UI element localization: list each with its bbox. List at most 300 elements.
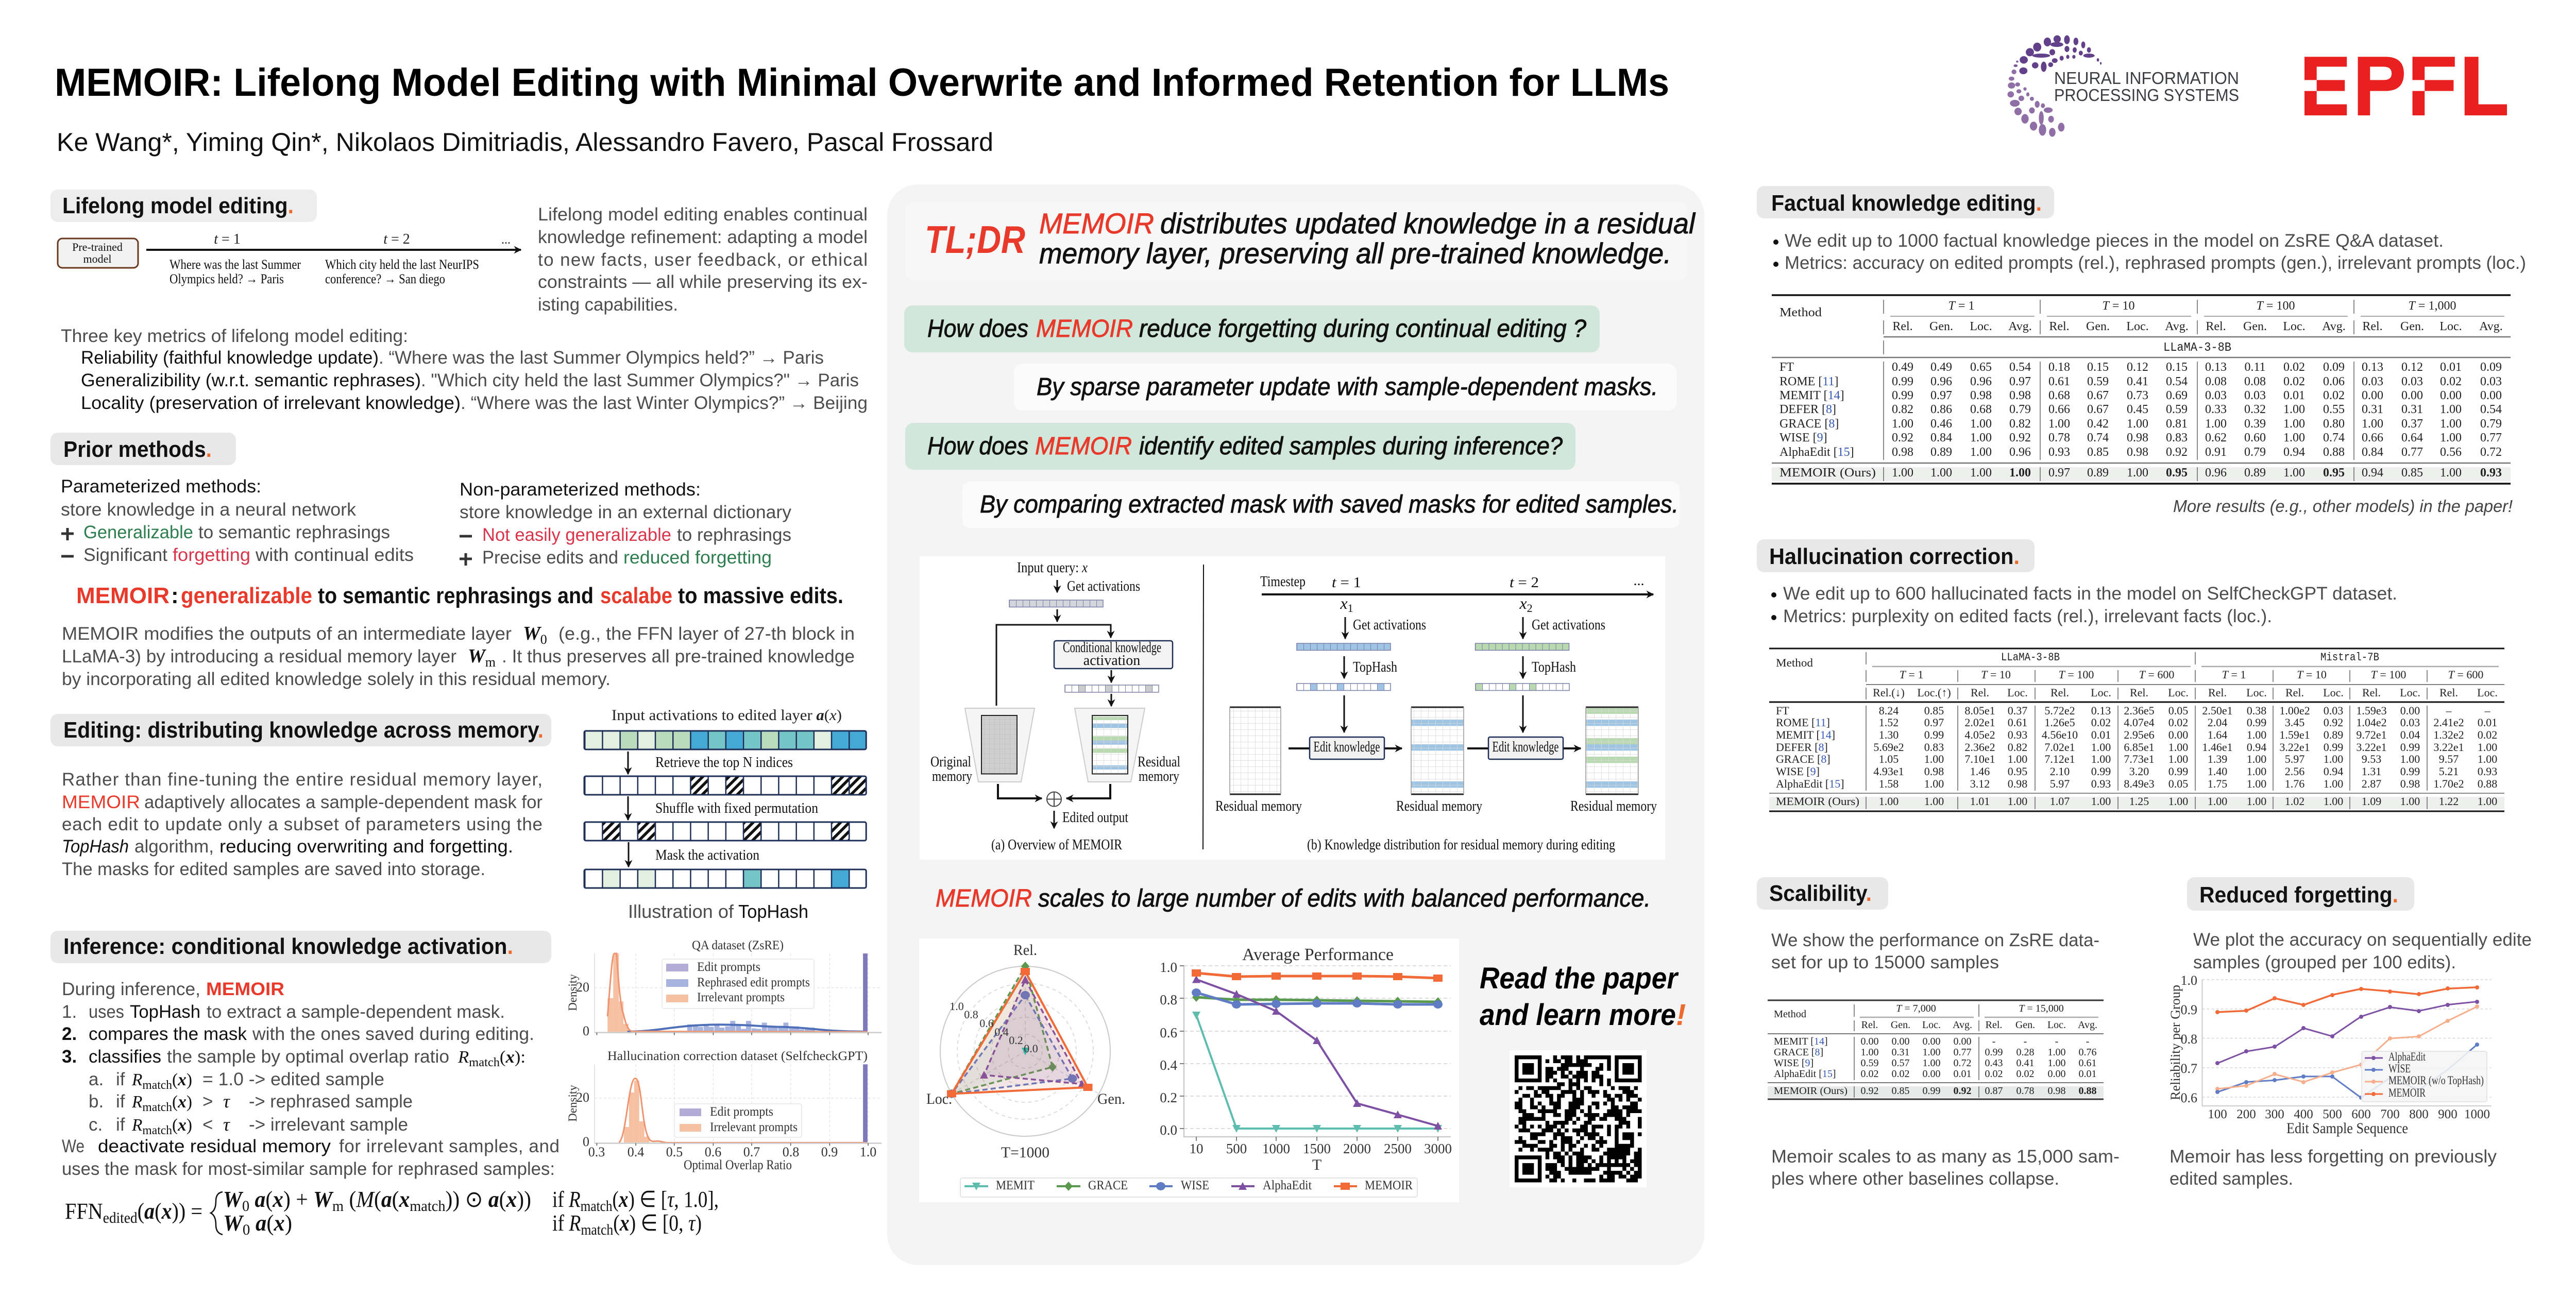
table: hallucination results: 2.36e2 <box>1964 741 1995 754</box>
table: scalability results: 1.00 <box>1923 1057 1940 1069</box>
axis labels: 0.8 <box>783 1145 799 1159</box>
table: hallucination results: 0.99 <box>2324 741 2343 754</box>
radar chart: 0.0 <box>1024 1042 1038 1055</box>
table: hallucination results: 0.82 <box>2008 741 2027 754</box>
table: factual results: 0.68 <box>1970 403 1992 416</box>
callout: TL;DR: distributes updated knowledge in a residual <box>1160 207 1696 240</box>
text: scalability intro <box>1771 930 2099 972</box>
text: non-parameterized methods: Non-parameterized methods: <box>460 480 701 500</box>
text: inference steps <box>62 979 560 1179</box>
table: hallucination results: 1.32e2 <box>2433 728 2464 741</box>
table: factual results: 0.08 <box>2244 375 2266 388</box>
table: factual results: 0.66 <box>2048 403 2070 416</box>
table: hallucination results: 3.22e1 <box>2356 741 2387 754</box>
logo text: NEURAL INFORMATION <box>2054 69 2239 88</box>
row: shuffled <box>584 822 866 841</box>
equation: ( <box>613 1210 620 1236</box>
table: hallucination results: 7.02e1 <box>2044 741 2075 754</box>
table: hallucination results: 7.73e1 <box>2124 753 2155 765</box>
table: hallucination results: 1.00 <box>2247 777 2266 790</box>
line chart: reliability per group <box>2168 973 2492 1137</box>
table: scalability results: MEMIT [14] <box>1774 1036 1828 1047</box>
table: factual results: 0.82 <box>2009 417 2031 431</box>
table: factual results: Gen. <box>2086 320 2110 333</box>
line chart: reliability per group: 400 <box>2294 1107 2313 1121</box>
radar chart <box>926 942 1125 1161</box>
axis labels: Density <box>566 1085 579 1122</box>
question 2 <box>905 423 1575 470</box>
equation: a(x) <box>256 1210 292 1236</box>
table: scalability results: 0.87 <box>1985 1085 2003 1097</box>
table: scalability results: - <box>2086 1036 2089 1047</box>
equation: match <box>581 1198 613 1215</box>
table: hallucination results: Loc. <box>2007 686 2028 699</box>
equation: a(x)) = <box>144 1199 206 1224</box>
text: MEMOIR description: W <box>468 645 485 667</box>
table: scalability results: T <box>1896 1003 1903 1014</box>
table: factual results: 0.09 <box>2323 361 2345 374</box>
text: inference steps: R <box>131 1092 143 1112</box>
text: inference steps: < <box>202 1115 213 1135</box>
table: hallucination results: 0.01 <box>2091 728 2111 741</box>
table: factual results: 0.59 <box>2166 403 2188 416</box>
table: hallucination results: 2.04 <box>2208 716 2227 729</box>
chart title: Hallucination correction dataset (SelfcheckGPT) <box>607 1049 868 1063</box>
table: hallucination results: 5.21 <box>2439 765 2459 778</box>
table: scalability results: 0.00 <box>1923 1068 1940 1080</box>
radar chart: 0.8 <box>964 1008 978 1021</box>
logo: NeurIPS <box>2007 36 2239 136</box>
table: hallucination results: 2.41e2 <box>2433 716 2464 729</box>
table: factual results: 0.15 <box>2087 361 2109 374</box>
table: scalability results: WISE [9] <box>1774 1057 1814 1069</box>
text: inference steps: deactivate residual memory <box>98 1136 331 1156</box>
line chart: average performance: 0.2 <box>1160 1090 1177 1105</box>
text: inference steps: compares the mask <box>89 1024 247 1044</box>
table: hallucination results: 0.99 <box>2400 765 2420 778</box>
table: factual results: 0.91 <box>2205 446 2227 459</box>
table: factual results: T = 100 <box>2257 299 2295 313</box>
line chart: reliability per group: 0.8 <box>2180 1032 2197 1047</box>
table: factual results: 0.02 <box>2283 375 2305 388</box>
text: inference steps: x) <box>178 1092 192 1112</box>
line chart: average performance: 2000 <box>1343 1141 1371 1156</box>
table: factual results: 0.89 <box>1930 446 1952 459</box>
table: factual results: 0.95 <box>2323 466 2345 480</box>
diagram (a): overview of MEMOIR: Conditional knowledge <box>1063 640 1161 656</box>
table: factual results: FT <box>1780 361 1794 374</box>
table: scalability results: 0.76 <box>2078 1047 2097 1058</box>
text: hallucination bullets <box>1771 584 2397 626</box>
table: hallucination results: MEMOIR (Ours) <box>1776 795 1859 808</box>
table: factual results: 0.67 <box>2087 389 2109 402</box>
equation: if R <box>552 1187 583 1212</box>
legend <box>662 959 814 1009</box>
text: inference steps: MEMOIR <box>206 979 284 999</box>
text: forgetting conclusion: Memoir has less forgetting on previously <box>2170 1147 2497 1167</box>
table: scalability results: Loc. <box>1922 1019 1941 1031</box>
table: hallucination results: 3.20 <box>2129 765 2149 778</box>
table: scalability results: 0.98 <box>2047 1085 2066 1097</box>
table: factual results: Avg. <box>2165 320 2189 333</box>
table: hallucination results: 4.93e1 <box>1873 765 1904 778</box>
timeline diagram: ... <box>501 233 511 247</box>
table: factual results: Avg. <box>2008 320 2032 333</box>
table: hallucination results: 9.72e1 <box>2356 728 2387 741</box>
table: hallucination results: 1.00 <box>2478 753 2497 765</box>
table: factual results: 1.00 <box>2283 431 2305 445</box>
table: factual results: 1.00 <box>2009 466 2031 480</box>
row: input activations <box>584 731 866 749</box>
text: key metrics: Locality (preservation of irrelevant knowledge) <box>81 393 461 413</box>
equation: ( <box>138 1199 144 1224</box>
table: hallucination results: 8.05e1 <box>1964 704 1995 717</box>
text: MEMOIR description <box>62 623 855 689</box>
table: factual results: 0.03 <box>2401 375 2423 388</box>
text: scalability intro: We show the performance on ZsRE data- <box>1771 930 2099 950</box>
table: scalability results: MEMOIR (Ours) <box>1774 1085 1848 1097</box>
table: hallucination results: 0.99 <box>2247 716 2266 729</box>
text: non-parameterized methods: reduced forgetting <box>623 548 772 568</box>
line chart: reliability per group: 200 <box>2236 1107 2256 1121</box>
table: hallucination results: 0.03 <box>2400 716 2420 729</box>
text: parameterized methods: store knowledge in a neural network <box>61 500 357 520</box>
text: scalability conclusion: ples where other baselines collapse. <box>1771 1169 2059 1189</box>
text: MEMOIR description: (e.g., the FFN layer of 27-th block in <box>558 624 855 644</box>
text: inference steps: R <box>131 1116 143 1135</box>
table: hallucination results: 1.46e1 <box>2202 741 2233 754</box>
table: factual results: 0.98 <box>2009 389 2031 402</box>
heading: scalability: Scalibility. <box>1769 881 1872 906</box>
table: hallucination results: 1.00 <box>2324 795 2343 808</box>
table: factual results: Gen. <box>1929 320 1953 333</box>
table: factual results: 1.00 <box>2283 403 2305 416</box>
text: inference steps: match <box>142 1124 172 1137</box>
table: hallucination results: 1.00 <box>2247 728 2266 741</box>
density plot <box>595 953 882 1035</box>
table: factual results: 1.00 <box>1892 417 1913 431</box>
table: hallucination results: = 600 <box>2148 668 2174 681</box>
table: hallucination results: = 100 <box>2067 668 2094 681</box>
text: editing description: Rather than fine-tuning the entire residual memory layer, <box>62 770 543 790</box>
text: MEMOIR description: LLaMA-3) by introducing a residual memory layer <box>62 646 456 667</box>
table: scalability results: 0.57 <box>1892 1057 1909 1069</box>
radar chart: Gen. <box>1097 1090 1125 1107</box>
text: editing description: MEMOIR <box>62 792 140 812</box>
table: scalability results: = 15,000 <box>2027 1003 2064 1014</box>
text: non-parameterized methods <box>460 480 791 568</box>
answer 2 <box>962 481 1680 528</box>
table: factual results: T = 1 <box>1948 299 1974 313</box>
table: factual results: 1.00 <box>2440 417 2462 431</box>
text: key metrics: . “Where was the last Summer Olympics held?” → Paris <box>379 348 824 368</box>
table: hallucination results: 7.12e1 <box>2044 753 2075 765</box>
axis labels <box>566 1085 876 1172</box>
diagram (a): overview of MEMOIR: memory <box>932 768 972 784</box>
text: MEMOIR description: m <box>485 655 496 670</box>
table: hallucination results: 0.03 <box>2324 704 2343 717</box>
table: hallucination results: 0.98 <box>2008 777 2027 790</box>
line chart: average performance: 1000 <box>1262 1141 1290 1156</box>
table: factual results: 0.79 <box>2244 446 2266 459</box>
equation: edited <box>103 1209 138 1226</box>
table: hallucination results: Loc. <box>2323 686 2344 699</box>
answer 1: By sparse parameter update with sample-dependent masks. <box>1037 373 1658 401</box>
table: factual results: Rel. <box>2362 320 2383 333</box>
answer 2: By comparing extracted mask with saved masks for edited samples. <box>980 491 1679 518</box>
text: editing description: reducing overwriting and forgetting. <box>219 836 513 857</box>
diagram: TopHash illustration: Input activations to edited layer a(x) <box>612 707 842 724</box>
table: hallucination results: 1.02 <box>2285 795 2304 808</box>
legend: AlphaEdit <box>1263 1179 1312 1192</box>
text: key metrics <box>61 326 868 413</box>
table: factual results: 0.56 <box>2440 446 2462 459</box>
table: hallucination results: ROME [11] <box>1776 716 1830 729</box>
equation: 0 <box>242 1198 249 1215</box>
question 1: How does <box>927 315 1028 343</box>
table: hallucination results: 5.72e2 <box>2044 704 2075 717</box>
text: inference steps: if <box>116 1115 125 1135</box>
text: hallucination bullets: We edit up to 600 hallucinated facts in the model on SelfCheckGPT dataset. <box>1783 584 2397 604</box>
diagram (b): knowledge distribution: Get activations <box>1353 617 1426 633</box>
table: factual results: 0.93 <box>2048 446 2070 459</box>
line chart: average performance: 1.0 <box>1160 960 1177 975</box>
table: hallucination results: 0.88 <box>2478 777 2497 790</box>
table: factual results: 1.00 <box>2440 466 2462 480</box>
table: hallucination results: 0.13 <box>2091 704 2111 717</box>
table: factual results: 0.03 <box>2244 389 2266 402</box>
table: hallucination results: Loc. <box>2400 686 2420 699</box>
table: hallucination results: DEFER [8] <box>1776 741 1828 754</box>
table: factual results: Method <box>1780 306 1822 319</box>
text: inference steps: TopHash <box>130 1002 200 1022</box>
table: hallucination results: Loc. <box>2246 686 2267 699</box>
table: factual results: 0.82 <box>1892 403 1913 416</box>
heading: editing: Editing: distributing knowledge across memory. <box>63 718 544 743</box>
text: factual bullets: Metrics: accuracy on edited prompts (rel.), rephrased prompts (gen.), irrelevant prompts (loc.) <box>1785 253 2526 273</box>
text: inference steps: We <box>62 1136 84 1156</box>
table: hallucination results: 1.00 <box>1879 795 1899 808</box>
table: factual results: 0.49 <box>1930 361 1952 374</box>
table: hallucination results: 1.30 <box>1879 728 1899 741</box>
table: scalability results: 0.43 <box>1985 1057 2003 1069</box>
table: hallucination results: 0.92 <box>2324 716 2343 729</box>
line chart: average performance: 2500 <box>1384 1141 1412 1156</box>
diagram (b): knowledge distribution: Residual memory <box>1570 798 1657 814</box>
table: factual results: 0.01 <box>2440 361 2462 374</box>
text: inference steps: = 1.0 -> edited sample <box>202 1069 384 1089</box>
table: factual results: 0.92 <box>2166 446 2188 459</box>
table: scalability results: 1.00 <box>2047 1057 2066 1069</box>
axis labels: 0.4 <box>628 1145 644 1159</box>
legend: WISE <box>2388 1062 2411 1075</box>
text: key metrics: Reliability (faithful knowledge update) <box>81 348 379 368</box>
table: factual results: 0.96 <box>1930 375 1952 388</box>
table: factual results <box>1772 295 2511 484</box>
table: hallucination results: 1.09 <box>2362 795 2381 808</box>
diagram (a): overview of MEMOIR: activation <box>1083 653 1140 669</box>
equation: 0 <box>243 1221 250 1238</box>
table: hallucination results: 1.00 <box>2247 765 2266 778</box>
table: factual results: Rel. <box>2206 320 2226 333</box>
table: hallucination results: 1.00 <box>2324 753 2343 765</box>
table: hallucination results: GRACE [8] <box>1776 753 1831 765</box>
text: factual bullets: We edit up to 1000 factual knowledge pieces in the model on ZsRE Q&A dataset. <box>1785 231 2444 251</box>
table: factual results: 0.00 <box>2362 389 2383 402</box>
text: inference steps: 2. <box>62 1024 77 1044</box>
legend <box>2362 1050 2487 1102</box>
table: hallucination results: 1.00 <box>2008 753 2027 765</box>
table: factual results: 0.96 <box>2009 446 2031 459</box>
table: factual results: 0.85 <box>2401 466 2423 480</box>
text: non-parameterized methods: to rephrasings <box>677 525 791 545</box>
table: factual results: 0.54 <box>2009 361 2031 374</box>
table: scalability results: 0.00 <box>2047 1068 2066 1080</box>
equation: ( <box>344 1187 356 1212</box>
heading: factual knowledge editing: Factual knowledge editing. <box>1771 191 2042 216</box>
table: factual results: 0.67 <box>2087 403 2109 416</box>
legend: Irrelevant prompts <box>710 1120 798 1134</box>
equation: a(x) + W <box>255 1187 333 1212</box>
diagram (b): knowledge distribution: Residual memory <box>1396 798 1482 814</box>
table: hallucination results: 2.02e1 <box>1964 716 1995 729</box>
table: hallucination results: 6.85e1 <box>2124 741 2155 754</box>
line chart: average performance: T <box>1312 1156 1321 1173</box>
table: hallucination results: LLaMA-3-8B <box>2001 651 2060 664</box>
text: scalability conclusion <box>1771 1147 2120 1189</box>
table: hallucination results: T <box>1900 668 1907 681</box>
callout: MEMOIR summary: generalizable <box>181 583 312 608</box>
table: factual results: 0.13 <box>2362 361 2383 374</box>
icon: QR code <box>1510 1050 1647 1187</box>
question 1: reduce forgetting during continual editing ? <box>1139 315 1586 343</box>
line chart: reliability per group: 300 <box>2265 1107 2284 1121</box>
table: hallucination results: T <box>2448 668 2455 681</box>
text: editing description: algorithm, <box>134 836 214 857</box>
table: hallucination results: Loc. <box>2091 686 2111 699</box>
diagram: TopHash illustration <box>584 707 866 922</box>
table: hallucination results: 0.99 <box>2091 765 2111 778</box>
table: factual results: 0.02 <box>2283 361 2305 374</box>
table: factual results: 0.39 <box>2244 417 2266 431</box>
table: hallucination results: Loc. <box>2168 686 2189 699</box>
table: factual results: 0.74 <box>2087 431 2109 445</box>
line chart: average performance: 1500 <box>1303 1141 1331 1156</box>
question 2: identify edited samples during inference? <box>1139 433 1563 460</box>
table: scalability results: 0.78 <box>2016 1085 2034 1097</box>
text: inference steps: a. <box>89 1069 104 1089</box>
text: intro paragraph: Lifelong model editing enables continual <box>538 204 868 225</box>
line chart: reliability per group: 600 <box>2351 1107 2371 1121</box>
text: inference steps: x) <box>178 1116 192 1135</box>
table: hallucination results: 1.64 <box>2208 728 2227 741</box>
diagram: TopHash illustration: Retrieve the top N indices <box>655 755 793 771</box>
axis labels: Density <box>566 974 579 1011</box>
table: hallucination results: Mistral-7B <box>2320 651 2379 664</box>
table: factual results: Loc. <box>2439 320 2462 333</box>
timeline diagram: t = 1 <box>214 231 241 247</box>
radar chart: 0.4 <box>994 1026 1009 1038</box>
text: non-parameterized methods: Precise edits and <box>482 548 618 568</box>
radar chart: 0.2 <box>1009 1034 1023 1047</box>
caption: TopHash <box>738 901 808 922</box>
equation: FFN <box>65 1199 107 1224</box>
text: editing description: adaptively allocates a sample-dependent mask for <box>144 792 543 812</box>
line chart: reliability per group: 100 <box>2208 1107 2227 1121</box>
line chart: reliability per group: 0.7 <box>2180 1061 2197 1076</box>
table: factual results: 0.03 <box>2362 375 2383 388</box>
equation: W <box>223 1187 244 1212</box>
question 2: MEMOIR <box>1035 433 1132 460</box>
table: factual results: Gen. <box>2400 320 2424 333</box>
panel: center TL;DR column <box>887 184 1704 1265</box>
text: inference steps: > <box>202 1091 213 1112</box>
table: hallucination results: 0.95 <box>2008 765 2027 778</box>
heading: reduced forgetting: Reduced forgetting. <box>2199 882 2398 908</box>
table: hallucination results: Rel. <box>1971 686 1989 699</box>
table: factual results: 0.77 <box>2480 431 2502 445</box>
table: factual results: Loc. <box>2283 320 2306 333</box>
table: scalability results: 1.00 <box>1923 1047 1940 1058</box>
diagram (b): knowledge distribution: x <box>1519 594 1527 612</box>
axis labels: 0 <box>583 1134 589 1149</box>
authors: Ke Wang*, Yiming Qin*, Nikolaos Dimitriadis, Alessandro Favero, Pascal Frossard <box>57 128 993 157</box>
text: inference steps: ( <box>172 1116 178 1135</box>
table: hallucination results: 0.93 <box>2091 777 2111 790</box>
table: factual results: 1.00 <box>2283 417 2305 431</box>
line chart: average performance: 0.6 <box>1160 1025 1177 1040</box>
diagram (b): knowledge distribution: t = 2 <box>1510 575 1539 591</box>
table: hallucination results: 0.98 <box>1924 765 1944 778</box>
table: hallucination results: 1.00 <box>2091 741 2111 754</box>
table: factual results: 0.93 <box>2480 466 2502 480</box>
text: inference steps: if <box>116 1091 125 1112</box>
table: hallucination results: 1.00 <box>2247 795 2266 808</box>
table: hallucination results: 5.97 <box>2285 753 2304 765</box>
table: factual results: WISE [9] <box>1780 431 1827 445</box>
panel: prior methods <box>50 433 855 689</box>
table: factual results: Rel. <box>2049 320 2070 333</box>
text: inference steps: τ <box>223 1114 230 1135</box>
heading: reduced forgetting <box>2187 877 2414 911</box>
diagram (a): overview of MEMOIR <box>930 560 1180 853</box>
note: more results: More results (e.g., other models) in the paper! <box>2173 497 2513 516</box>
table: scalability results: 0.99 <box>1985 1047 2003 1058</box>
logo: EPFL <box>2304 57 2507 115</box>
text: inference steps: with the ones saved during editing. <box>252 1024 534 1044</box>
text: MEMOIR description: W <box>523 623 540 644</box>
diagram (a): overview of MEMOIR: Get activations <box>1067 578 1140 594</box>
equation: a(x)) <box>488 1187 532 1212</box>
table: hallucination results: 1.00 <box>2400 753 2420 765</box>
table: scalability results: 0.88 <box>2078 1085 2097 1097</box>
table: factual results: 0.85 <box>2087 446 2109 459</box>
table: factual results: MEMIT [14] <box>1780 389 1844 402</box>
text: forgetting intro: We plot the accuracy on sequentially edite <box>2193 930 2532 950</box>
table: factual results: 0.98 <box>1970 389 1992 402</box>
text: inference steps: ( <box>500 1048 505 1067</box>
table: hallucination results: 1.00 <box>2091 795 2111 808</box>
table: hallucination results: Rel. <box>2285 686 2304 699</box>
table: hallucination results: T <box>2222 668 2229 681</box>
table: factual results: 0.15 <box>2166 361 2188 374</box>
table: factual results: 0.97 <box>2009 375 2031 388</box>
table: hallucination results: 1.40 <box>2208 765 2227 778</box>
table: hallucination results: 2.36e5 <box>2124 704 2155 717</box>
table: factual results: 0.88 <box>2323 446 2345 459</box>
diagram (a): overview of MEMOIR: Edited output <box>1062 810 1128 826</box>
table: hallucination results: 0.98 <box>2400 777 2420 790</box>
